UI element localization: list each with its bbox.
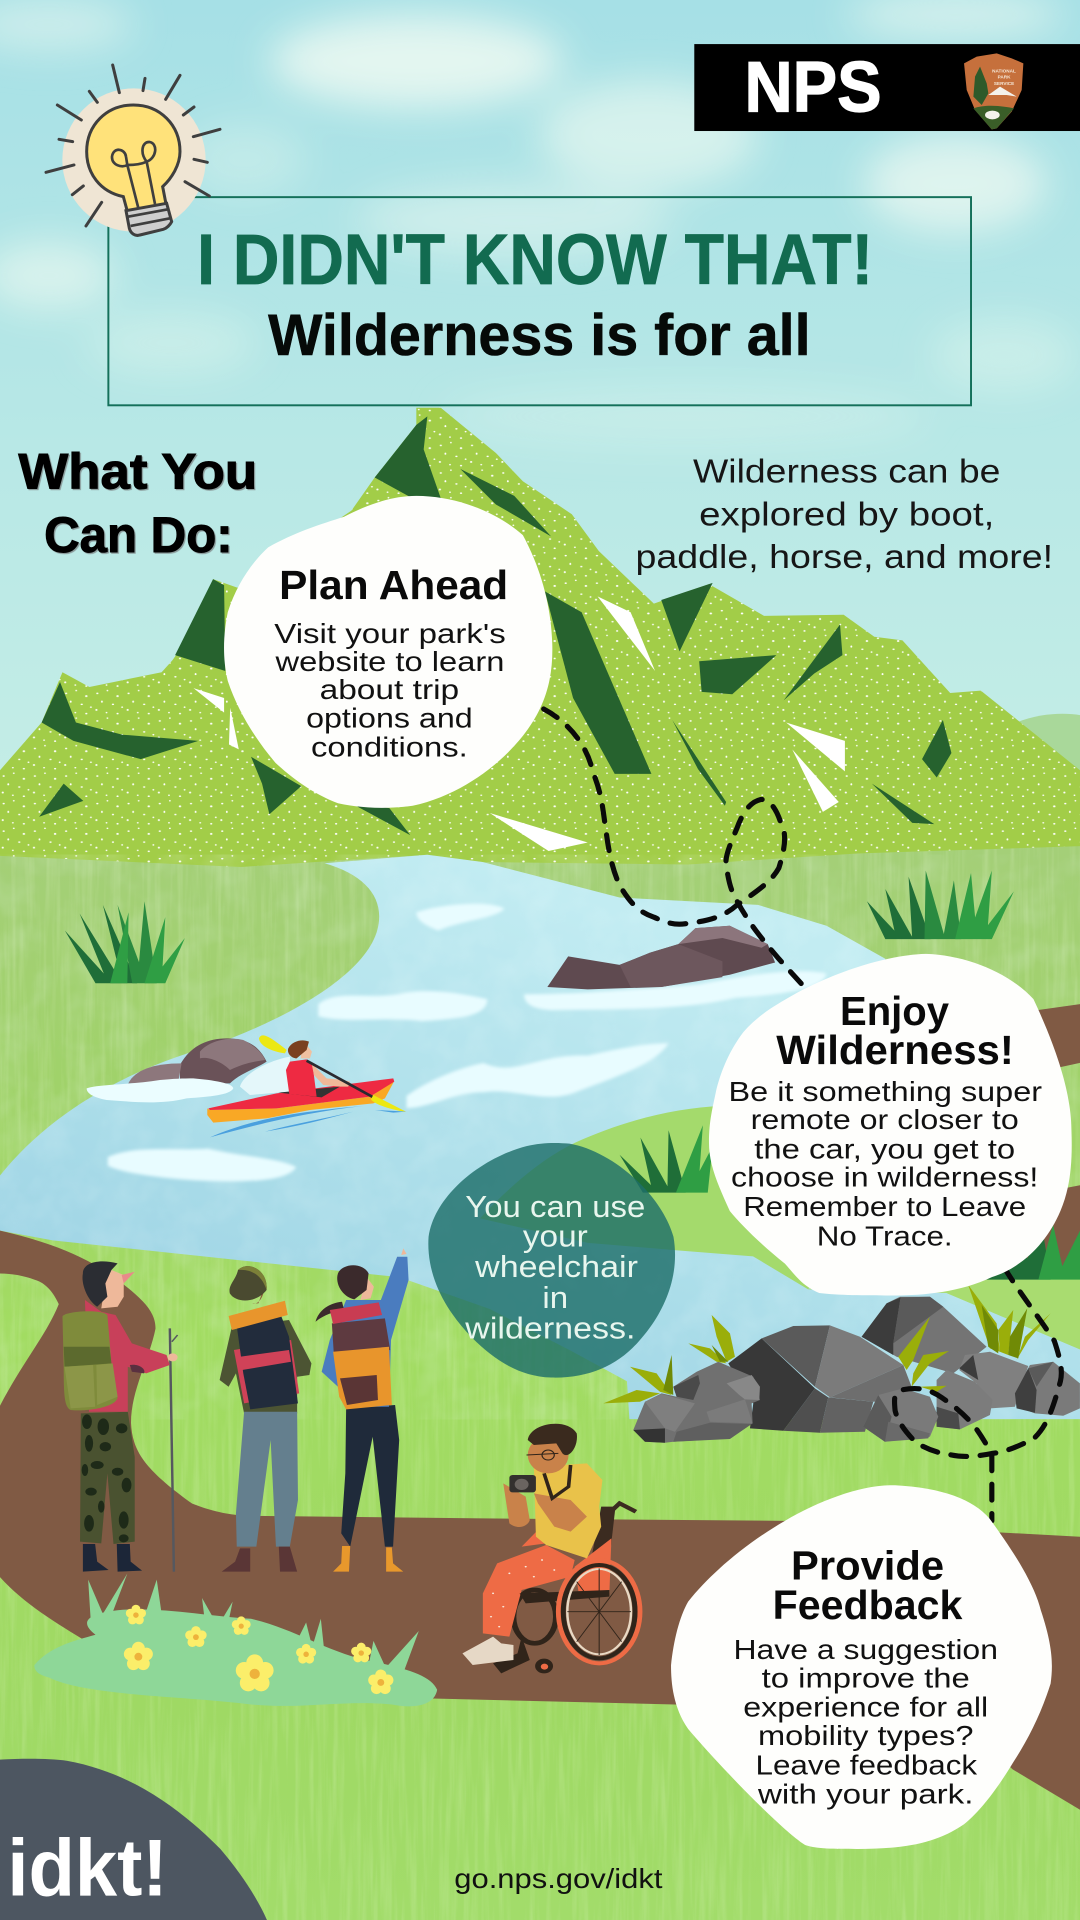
text: wheelchair callout: your	[523, 1220, 588, 1254]
icon: light bulb	[46, 65, 220, 235]
text: plan ahead body: Visit your park's	[274, 618, 506, 649]
text: plan ahead body	[274, 618, 506, 763]
text: provide feedback body: to improve the	[762, 1662, 970, 1693]
text: ways to explore: explored by boot,	[699, 496, 994, 533]
text: enjoy wilderness body: choose in wilderness!	[731, 1162, 1038, 1193]
text: ways to explore: Wilderness can be	[693, 453, 1000, 490]
icon: NPS arrowhead: SERVICE	[994, 81, 1014, 86]
text: enjoy wilderness body	[729, 1076, 1042, 1251]
grass tuft right upper	[867, 871, 1014, 939]
heading: What You Can Do: What You	[18, 444, 257, 500]
flower patch	[34, 1573, 437, 1706]
text: enjoy wilderness body: remote or closer to	[751, 1104, 1019, 1135]
text: enjoy wilderness body: No Trace.	[817, 1220, 953, 1251]
rock cluster with plants	[603, 1285, 1080, 1443]
icon: NPS arrowhead: NATIONAL	[992, 68, 1016, 73]
text: provide feedback body: Have a suggestion	[733, 1634, 998, 1665]
icon: NPS arrowhead	[964, 53, 1023, 129]
subtitle: Wilderness is for all	[268, 303, 811, 368]
panel: enjoy wilderness	[709, 954, 1072, 1296]
text: enjoy wilderness body: the car, you get to	[754, 1133, 1015, 1164]
text: provide feedback body	[733, 1634, 998, 1810]
text: ways to explore: paddle, horse, and more!	[636, 539, 1053, 576]
website link: go.nps.gov/idkt	[454, 1863, 663, 1894]
panel: wheelchair callout	[428, 1143, 675, 1378]
text: wheelchair callout	[464, 1190, 645, 1345]
heading: plan ahead: Plan Ahead	[279, 562, 508, 608]
brown dirt path	[0, 1004, 1080, 1810]
heading: enjoy wilderness: Enjoy	[840, 988, 949, 1034]
sky background with clouds	[0, 0, 1080, 906]
river foam patches	[108, 904, 827, 1181]
title: I DIDN'T KNOW THAT!	[197, 221, 873, 300]
title	[197, 221, 873, 368]
icon: NPS arrowhead: PARK	[998, 75, 1011, 80]
heading: enjoy wilderness	[776, 988, 1014, 1073]
dashed trail from Plan Ahead to Enjoy Wilderness	[544, 709, 802, 984]
NPS banner	[694, 44, 1080, 131]
heading: provide feedback: Provide	[791, 1543, 944, 1589]
text: plan ahead body: about trip	[320, 674, 459, 705]
text: wheelchair callout: You can use	[465, 1190, 645, 1224]
panel: provide feedback	[671, 1485, 1052, 1849]
idkt logo corner: idkt!	[7, 1824, 168, 1914]
text: provide feedback body: experience for all	[743, 1692, 988, 1723]
grass tuft right lower	[980, 1211, 1080, 1280]
text: wheelchair callout: in	[542, 1281, 568, 1315]
text: ways to explore	[636, 453, 1053, 576]
text: provide feedback body: Leave feedback	[756, 1749, 978, 1780]
heading: provide feedback	[773, 1543, 963, 1628]
text: provide feedback body: with your park.	[757, 1779, 973, 1810]
NPS wordmark: NPS	[744, 48, 882, 127]
heading: What You Can Do: Can Do:	[44, 507, 233, 563]
text: wheelchair callout: wheelchair	[474, 1250, 638, 1284]
title box	[108, 197, 971, 405]
mountain	[0, 408, 1080, 867]
heading: provide feedback: Feedback	[773, 1582, 963, 1628]
text: provide feedback body: mobility types?	[758, 1720, 973, 1751]
river boulder	[547, 926, 775, 989]
hiker pointing up	[316, 1248, 409, 1572]
kayaker with rock and foam	[87, 1035, 407, 1137]
grass ground	[0, 714, 1080, 1920]
text: plan ahead body: options and	[306, 702, 473, 733]
heading: enjoy wilderness: Wilderness!	[776, 1027, 1014, 1073]
text: plan ahead body: website to learn	[274, 646, 504, 677]
grass tuft left	[65, 901, 185, 983]
hikers and wheelchair user	[62, 1248, 640, 1673]
grass tuft middle	[620, 1125, 713, 1193]
river	[0, 855, 1080, 1419]
text: plan ahead body: conditions.	[311, 732, 468, 763]
dashed trail from Enjoy Wilderness to Provide Feedback	[895, 1267, 1061, 1521]
idkt logo corner	[0, 1759, 267, 1920]
panel: plan ahead	[224, 496, 552, 808]
hiker with walking stick	[62, 1261, 178, 1572]
text: enjoy wilderness body: Be it something super	[729, 1076, 1042, 1107]
text: wheelchair callout: wilderness.	[464, 1311, 636, 1345]
wheelchair user with camera	[462, 1424, 640, 1673]
hiker with olive hat	[220, 1266, 311, 1572]
text: enjoy wilderness body: Remember to Leave	[743, 1191, 1026, 1222]
grass hill beyond the river	[480, 1106, 1080, 1349]
heading: What You Can Do	[18, 444, 257, 563]
